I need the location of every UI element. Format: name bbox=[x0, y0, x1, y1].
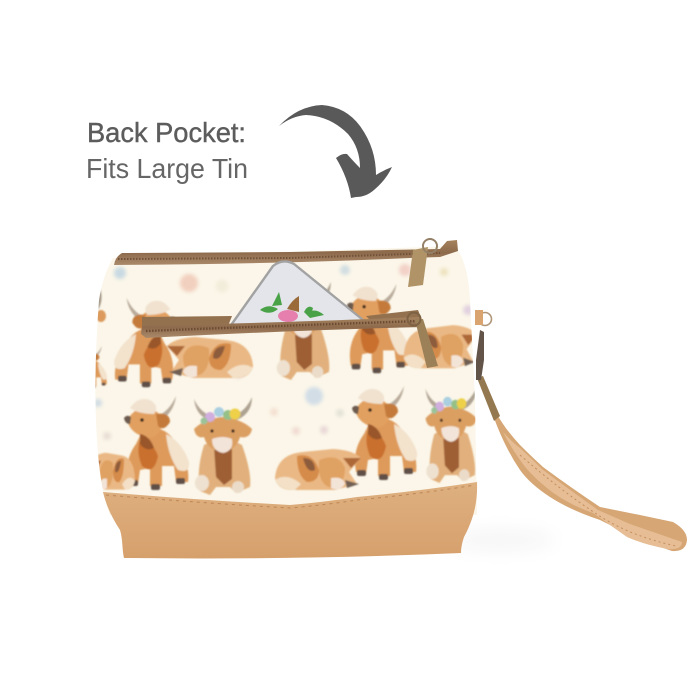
infographic canvas bbox=[88, 105, 687, 558]
tin rim bbox=[229, 261, 368, 328]
heading line one: Back Pocket: bbox=[87, 117, 246, 148]
strap back layer bbox=[494, 416, 687, 551]
strap stitching bbox=[520, 455, 676, 546]
strap front layer bbox=[503, 432, 682, 549]
strap ring bbox=[478, 312, 492, 326]
flower: tin artwork leaves bbox=[260, 292, 324, 318]
icon: curved arrow pointing down to the bag bbox=[279, 105, 392, 198]
calf print pattern bbox=[81, 264, 477, 495]
top zipper bbox=[114, 240, 458, 265]
strap tab bbox=[475, 310, 483, 325]
tin peeking from the pocket bbox=[229, 261, 368, 330]
wrist strap bbox=[475, 310, 687, 551]
front pocket zipper teeth bbox=[146, 321, 420, 331]
heading line two: Fits Large Tin bbox=[86, 153, 248, 184]
swivel hook bbox=[476, 330, 484, 380]
bag ground shadow bbox=[445, 530, 555, 550]
bag canvas bbox=[95, 246, 477, 515]
front zipper ring bbox=[408, 312, 420, 326]
top zipper ring bbox=[423, 239, 437, 253]
bottom row calves bbox=[92, 386, 477, 495]
top row calves bbox=[81, 282, 477, 388]
heading: Back Pocket label bbox=[86, 117, 248, 184]
scattered flowers bbox=[94, 264, 473, 440]
leather stitching bbox=[106, 485, 475, 508]
top zipper teeth bbox=[118, 253, 440, 259]
flower: tin artwork blossom bbox=[278, 310, 298, 322]
tin body bbox=[229, 261, 368, 330]
top zipper pull bbox=[408, 247, 428, 287]
front zipper pull bbox=[415, 319, 438, 368]
front pocket zipper upper strand bbox=[142, 310, 422, 330]
front pocket zipper lower strand bbox=[141, 317, 424, 338]
strap metal clasp bbox=[477, 376, 500, 421]
leather base bbox=[103, 482, 477, 558]
bag body bbox=[81, 239, 477, 558]
icon: tin artwork ear bbox=[287, 296, 299, 312]
